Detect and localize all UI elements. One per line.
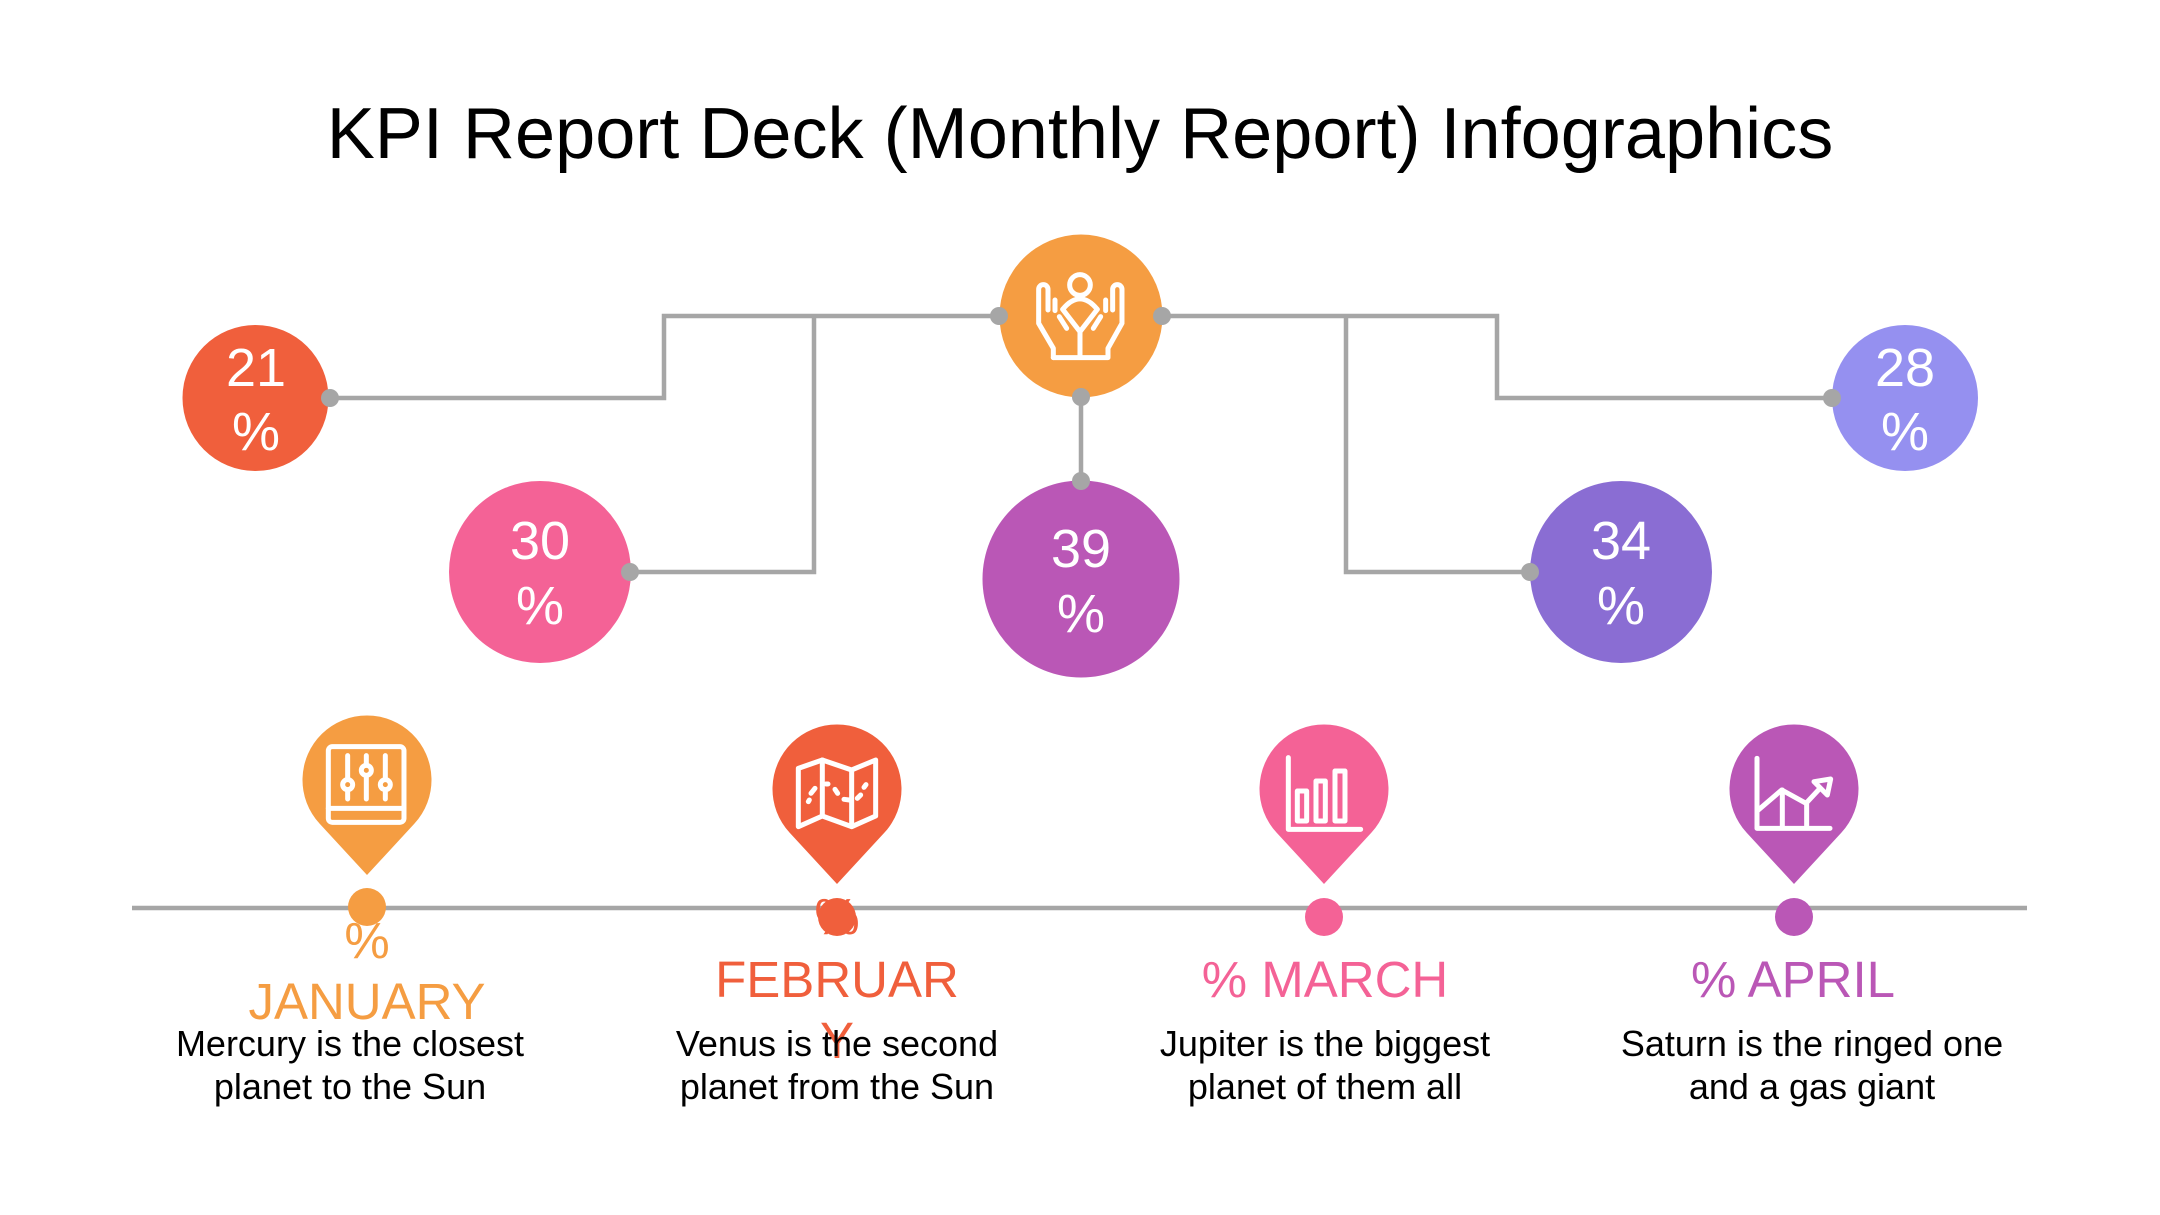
KPI circle 28%: 28 [1875,338,1935,398]
January column: JANUARY [248,973,486,1030]
April column [1621,724,2003,1107]
icon: map [798,760,876,827]
KPI circle 39% [982,480,1180,678]
pin: January [302,715,432,875]
KPI circle 21% [182,325,328,471]
timeline dot: February [818,898,856,936]
title: KPI Report Deck (Monthly Report) Infographics [327,94,1833,174]
KPI circle 34%: % [1597,576,1645,636]
KPI circle 21%: % [232,402,280,462]
January description: Mercury is the closest [176,1023,524,1064]
pin: April [1730,724,1858,884]
February column: Y [820,1012,854,1069]
KPI circle 30% [449,481,631,663]
March label: % MARCH [1202,951,1448,1008]
pin: February [772,724,902,884]
KPI circle 30%: % [516,576,564,636]
January column [176,715,524,1107]
hub circle with hands icon [1000,234,1162,398]
KPI circle 39%: 39 [1051,519,1111,579]
February column: FEBRUAR [715,951,959,1008]
March column [1160,724,1490,1107]
timeline dot: January [348,888,386,926]
KPI circle 28% [1832,325,1978,471]
March description: Jupiter is the biggest [1160,1023,1490,1064]
KPI circle 34% [1530,481,1712,663]
April label: % APRIL [1691,951,1895,1008]
icon: growth chart [1757,758,1831,828]
March column: planet of them all [1188,1066,1462,1107]
icon: bar chart [1288,758,1361,829]
KPI circle 34%: 34 [1591,511,1651,571]
KPI circle 21%: 21 [226,338,286,398]
timeline [132,906,2027,910]
February description: Venus is the second [676,1023,998,1064]
connector lines [329,316,1832,572]
KPI circle 39%: % [1057,584,1105,644]
KPI circle 30%: 30 [510,511,570,571]
timeline dot: April [1775,898,1813,936]
January column: planet to the Sun [214,1066,486,1107]
timeline dot: March [1305,898,1343,936]
KPI circle 28%: % [1881,402,1929,462]
pin: March [1260,724,1388,884]
April column: and a gas giant [1689,1066,1935,1107]
February column: planet from the Sun [680,1066,994,1107]
icon: sliders [328,747,404,822]
circle connector dots [321,389,1841,581]
April description: Saturn is the ringed one [1621,1023,2003,1064]
February label: % [814,888,860,945]
icon: hands holding person [1039,275,1122,358]
January label: % [344,912,390,969]
connector dots [990,307,1171,406]
February column [676,724,998,1107]
